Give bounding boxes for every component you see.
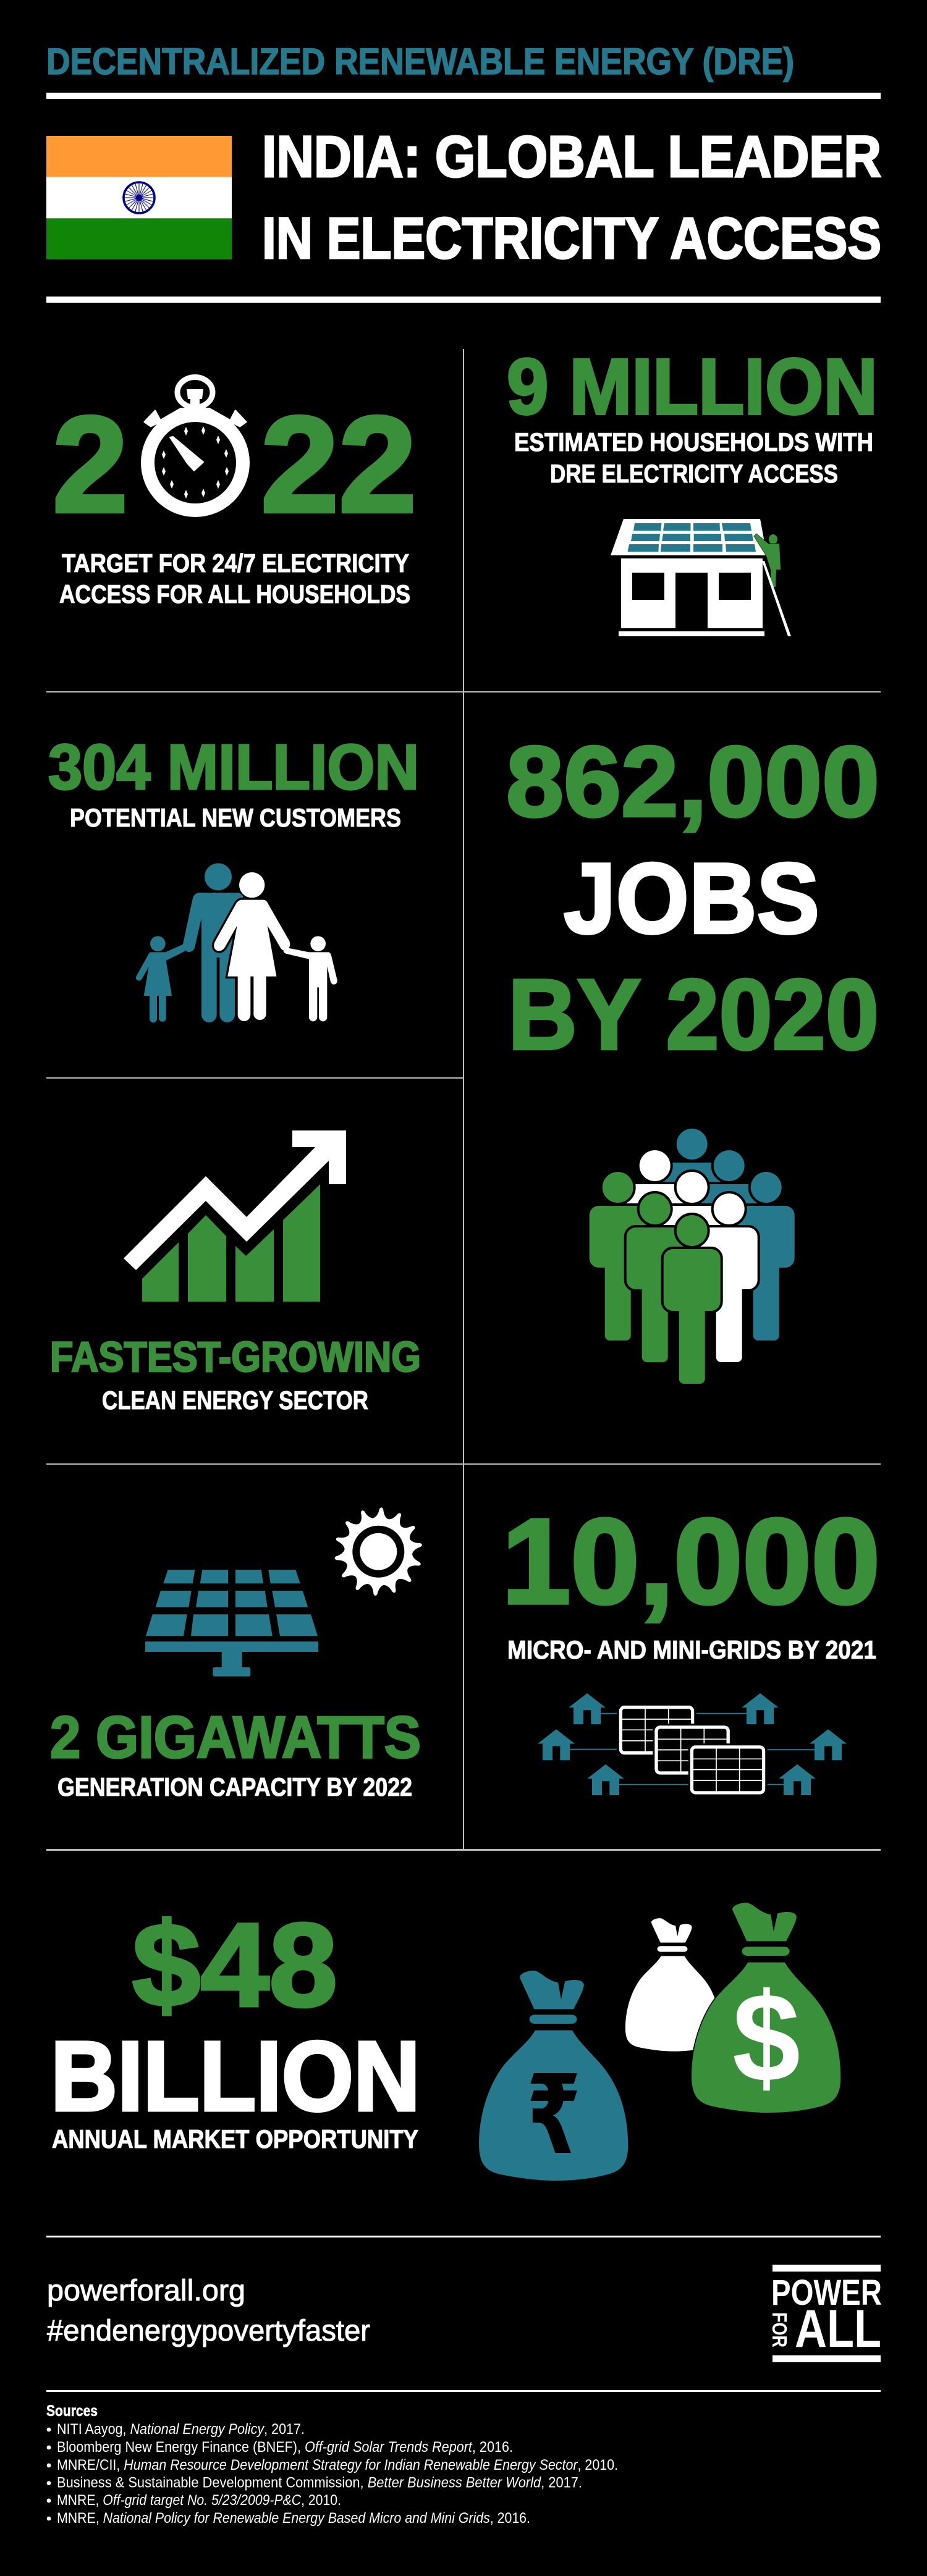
sources: Sources: [46, 2402, 98, 2420]
icon: money bags: [479, 1903, 840, 2181]
icon: growth chart: [124, 1130, 346, 1302]
stat: $48 billion: $48: [132, 1898, 337, 2031]
stat: 10,000: 10,000: [502, 1494, 880, 1629]
sources: [46, 2402, 618, 2527]
header: decentralized renewable energy: DECENTRALIZED RENEWABLE ENERGY (DRE): [46, 41, 794, 82]
logo: power for all: [768, 2265, 882, 2362]
2022 number: 22: [261, 388, 417, 541]
stat: 9 million: 9 MILLION: [507, 343, 878, 431]
panel: 9 million households: [507, 343, 878, 636]
icon: money bags: ₹: [527, 2054, 581, 2176]
stat: 862,000 jobs by 2020: 862,000: [506, 726, 879, 838]
caption: customers: POTENTIAL NEW CUSTOMERS: [70, 803, 401, 832]
panel: jobs: [506, 726, 879, 1384]
panel: 304 million customers: [48, 731, 419, 1022]
stat: $48 billion: BILLION: [51, 2021, 420, 2131]
panel: fastest-growing: [50, 1130, 421, 1415]
panel: 10,000 mini-grids: [502, 1494, 880, 1796]
sources: Business & Sustainable Development Commission, Better Business Better World, 2017.: [57, 2475, 582, 2491]
icon: stopwatch: [141, 377, 250, 517]
stat: 304 million: 304 MILLION: [48, 731, 419, 802]
icon: india flag: [46, 136, 232, 259]
caption: generation capacity: GENERATION CAPACITY BY 2022: [57, 1772, 412, 1801]
footer links: powerforall.org: [47, 2275, 245, 2307]
stat: 862,000 jobs by 2020: JOBS: [564, 843, 819, 954]
panel: 2 gigawatts: [50, 1507, 423, 1801]
caption: market opportunity: ANNUAL MARKET OPPORTUNITY: [52, 2124, 418, 2153]
heading: fastest-growing: FASTEST-GROWING: [50, 1333, 421, 1381]
caption: mini-grids: MICRO- AND MINI-GRIDS BY 2021: [507, 1635, 876, 1664]
footer links: [47, 2275, 370, 2347]
2022 number: [53, 388, 417, 541]
caption: target: [59, 549, 410, 608]
sources: Bloomberg New Energy Finance (BNEF), Off-grid Solar Trends Report, 2016.: [57, 2439, 513, 2456]
icon: crowd of workers: [590, 1129, 795, 1384]
stat: 2 gigawatts: 2 GIGAWATTS: [50, 1704, 421, 1770]
icon: house with solar roof: [611, 519, 791, 636]
sources: MNRE/CII, Human Resource Development Strategy for Indian Renewable Energy Sector, 2010.: [57, 2457, 618, 2473]
caption: households: ESTIMATED HOUSEHOLDS WITH: [514, 427, 873, 457]
2022 number: 2: [53, 388, 128, 541]
icon: mini-grid network: [538, 1693, 847, 1796]
stat: 862,000 jobs by 2020: [506, 726, 879, 1071]
footer links: #endenergypovertyfaster: [47, 2315, 370, 2347]
stat: $48 billion: [51, 1898, 420, 2131]
caption: target: ACCESS FOR ALL HOUSEHOLDS: [59, 579, 410, 608]
panel: 2022 target: [53, 377, 417, 608]
stat: 862,000 jobs by 2020: BY 2020: [508, 959, 879, 1071]
icon: family: [136, 863, 337, 1022]
caption: households: DRE ELECTRICITY ACCESS: [550, 459, 838, 488]
logo: power for all: ALL: [795, 2299, 881, 2359]
sources: MNRE, Off-grid target No. 5/23/2009-P&C, 2010.: [57, 2492, 341, 2509]
sources: MNRE, National Policy for Renewable Energy Based Micro and Mini Grids, 2016.: [57, 2510, 530, 2527]
logo: power for all: FOR: [768, 2312, 791, 2347]
logo: power for all: POWER: [771, 2273, 882, 2313]
icon: solar panel: [145, 1570, 318, 1677]
icon: money bags: $: [732, 1967, 800, 2108]
caption: target: TARGET FOR 24/7 ELECTRICITY: [62, 549, 409, 578]
sources: NITI Aayog, National Energy Policy, 2017.: [57, 2421, 305, 2438]
title: [262, 124, 881, 271]
caption: clean energy: CLEAN ENERGY SECTOR: [102, 1386, 368, 1415]
caption: households: [514, 427, 873, 488]
icon: sun: [334, 1507, 423, 1596]
panel: $48 billion: [51, 1898, 840, 2181]
figure on ladder: [754, 534, 781, 587]
